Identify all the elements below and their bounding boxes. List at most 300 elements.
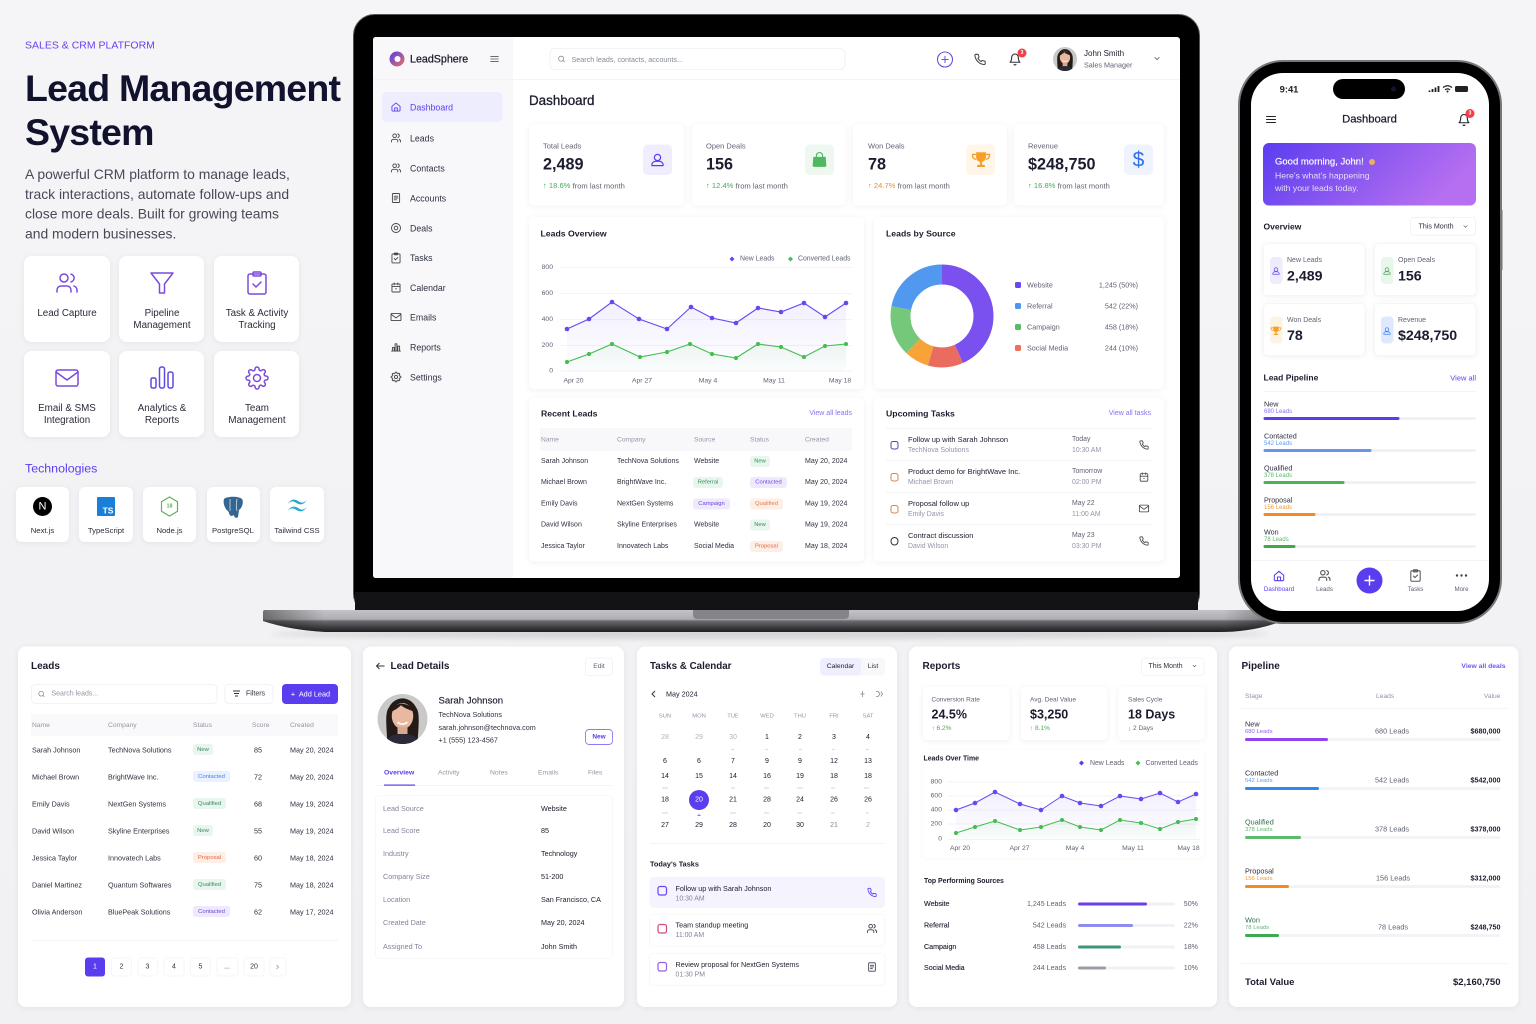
panel: lead details bbox=[363, 646, 624, 1007]
total value: $2,160,750 bbox=[1453, 977, 1500, 988]
icon: Next.js: N bbox=[39, 500, 47, 512]
line chart: leads over time: New Leads bbox=[1090, 760, 1125, 767]
search box: Search leads, contacts, accounts... bbox=[572, 55, 683, 64]
KPI: sales cycle: 18 Days bbox=[1128, 708, 1175, 722]
table rows: May 19, 2024 bbox=[290, 826, 334, 836]
feature labels: Reports bbox=[145, 415, 179, 426]
technology labels: TypeScript bbox=[88, 526, 125, 535]
profile photo bbox=[378, 694, 428, 744]
donut legend: 244 (10%) bbox=[1105, 344, 1138, 352]
detail tabs: Overview bbox=[384, 770, 415, 776]
pipeline rows: 680 Leads bbox=[1245, 729, 1273, 735]
line chart: 200 bbox=[542, 342, 553, 349]
calendar dates: 2 bbox=[866, 822, 870, 829]
pipeline header: Stage bbox=[1245, 693, 1263, 700]
calendar dates: 16 bbox=[763, 773, 771, 780]
task rows bbox=[891, 435, 1149, 550]
feature labels: Team bbox=[245, 403, 269, 414]
panel: pipeline: Pipeline bbox=[1242, 661, 1280, 672]
calendar dates: 21 bbox=[729, 796, 737, 804]
technology labels bbox=[31, 526, 320, 535]
pipeline rows: $680,000 bbox=[1471, 726, 1500, 736]
pagination: 5 bbox=[199, 964, 203, 970]
table header: Name bbox=[32, 722, 50, 729]
pagination bbox=[85, 958, 286, 976]
table rows: May 19, 2024 bbox=[805, 522, 848, 528]
line chart: Apr 27 bbox=[632, 378, 652, 384]
KPI: sales cycle: Sales Cycle bbox=[1128, 696, 1163, 704]
task rows: Proposal follow up bbox=[908, 499, 969, 508]
stat: won deals bbox=[1264, 304, 1365, 356]
chart legend: Converted Leads bbox=[798, 256, 851, 262]
KPI: conversion rate: 24.5% bbox=[932, 708, 967, 722]
top performing sources: Top Performing Sources bbox=[924, 878, 1004, 885]
table rows: May 18, 2024 bbox=[805, 543, 848, 550]
detail tabs: Notes bbox=[490, 770, 508, 776]
period dropdown bbox=[1142, 658, 1204, 676]
table header: Status bbox=[750, 436, 770, 444]
calendar dates: 1 bbox=[765, 734, 769, 741]
task: standup: 11:00 AM bbox=[676, 932, 704, 939]
task: follow up: Follow up with Sarah Johnson bbox=[676, 884, 771, 893]
detail table: San Francisco, CA bbox=[541, 895, 601, 904]
detail tabs bbox=[375, 770, 612, 786]
task rows: 03:30 PM bbox=[1072, 543, 1102, 550]
welcome banner bbox=[1263, 143, 1476, 206]
pipeline rows: 78 Leads bbox=[1245, 925, 1269, 931]
calendar dates: 29 bbox=[695, 822, 703, 829]
donut legend: 542 (22%) bbox=[1105, 302, 1138, 310]
nav items: Accounts bbox=[410, 194, 447, 204]
panel: reports: Reports bbox=[922, 661, 961, 672]
table rows: Quantum Softwares bbox=[108, 880, 172, 890]
line chart: May 11 bbox=[763, 378, 785, 384]
panel: leads overview bbox=[529, 217, 864, 389]
line chart: leads over time bbox=[923, 750, 1204, 858]
nav: dashboard: Dashboard bbox=[1264, 586, 1295, 593]
line chart: Apr 20 bbox=[563, 378, 584, 384]
table rows: May 18, 2024 bbox=[290, 880, 334, 890]
panel: recent leads bbox=[529, 398, 864, 562]
table rows: 62 bbox=[254, 908, 262, 916]
table rows: New bbox=[197, 747, 210, 753]
detail table: Technology bbox=[541, 849, 578, 858]
pipeline rows: $378,000 bbox=[1471, 824, 1500, 834]
table rows: New bbox=[197, 828, 210, 834]
donut legend: 1,245 (50%) bbox=[1099, 280, 1138, 290]
line chart: May 4 bbox=[699, 378, 717, 384]
task rows: TechNova Solutions bbox=[908, 447, 969, 454]
table rows: May 20, 2024 bbox=[290, 772, 334, 782]
table rows: BrightWave Inc. bbox=[617, 479, 666, 486]
pipeline rows: 680 Leads bbox=[1264, 409, 1292, 415]
nav items: Tasks bbox=[410, 253, 433, 263]
KPI: open deals bbox=[692, 124, 846, 206]
detail table: 85 bbox=[541, 826, 549, 835]
table rows: Daniel Martinez bbox=[32, 880, 82, 890]
icon: Node.js bbox=[162, 497, 178, 516]
calendar dates: 6 bbox=[663, 758, 667, 765]
view toggle: List bbox=[868, 663, 878, 670]
profile text bbox=[438, 696, 536, 744]
lead pipeline: View all bbox=[1450, 374, 1476, 382]
total value: Total Value bbox=[1245, 977, 1294, 988]
title: System bbox=[25, 111, 154, 153]
KPI: sales cycle: ↓ 2 Days bbox=[1128, 725, 1154, 732]
pipeline rows: New bbox=[1245, 720, 1260, 728]
KPI: average deal value: ↑ 8.1% bbox=[1030, 725, 1050, 732]
pipeline rows: 378 Leads bbox=[1375, 824, 1409, 834]
user name bbox=[1084, 49, 1133, 70]
pipeline rows: 156 Leads bbox=[1376, 874, 1410, 882]
table header: Created bbox=[805, 436, 829, 444]
nav items: Deals bbox=[410, 224, 433, 234]
calendar dates: 20 bbox=[763, 822, 771, 829]
nav items: Settings bbox=[410, 372, 442, 382]
detail tabs: Emails bbox=[538, 770, 559, 776]
phone header: Dashboard bbox=[1342, 114, 1397, 126]
table rows: New bbox=[754, 458, 767, 464]
panel: tasks and calendar bbox=[637, 646, 897, 1007]
technology labels: PostgreSQL bbox=[212, 526, 255, 535]
line chart: leads over time: 400 bbox=[931, 806, 942, 814]
stat: won deals: 78 bbox=[1287, 328, 1303, 344]
donut legend: Website bbox=[1027, 280, 1053, 290]
task rows: 02:00 PM bbox=[1072, 479, 1102, 486]
top performing sources: 458 Leads bbox=[1033, 943, 1066, 951]
selected date bbox=[689, 790, 709, 810]
icon: bag bbox=[805, 144, 834, 175]
table rows bbox=[541, 456, 848, 552]
task rows: Product demo for BrightWave Inc. bbox=[908, 467, 1020, 476]
line chart: 600 bbox=[542, 290, 553, 297]
pipeline rows: 378 Leads bbox=[1264, 473, 1292, 479]
pipeline rows: Qualified bbox=[1245, 818, 1274, 826]
bottom navigation bbox=[1251, 560, 1489, 594]
panel: pipeline bbox=[1229, 646, 1518, 1007]
overview heading: Overview bbox=[1264, 222, 1302, 232]
table rows: Contacted bbox=[198, 909, 225, 915]
table rows: New bbox=[754, 522, 767, 528]
table rows: 85 bbox=[254, 746, 262, 754]
donut legend: Campaign bbox=[1027, 322, 1060, 332]
line chart: leads over time: 200 bbox=[931, 820, 942, 828]
phone header: 3 bbox=[1469, 110, 1472, 116]
panel: upcoming tasks: View all tasks bbox=[1109, 410, 1151, 417]
lead pipeline: Lead Pipeline bbox=[1264, 372, 1319, 382]
top performing sources: 10% bbox=[1184, 964, 1199, 972]
phone body bbox=[1238, 61, 1502, 623]
add lead button bbox=[282, 684, 338, 704]
table header bbox=[540, 428, 852, 451]
detail table: Lead Score bbox=[383, 826, 420, 835]
stat: revenue: $248,750 bbox=[1398, 328, 1457, 344]
calendar dates: 18 bbox=[864, 773, 872, 780]
detail tabs: Files bbox=[588, 770, 603, 776]
top performing sources: 244 Leads bbox=[1033, 964, 1066, 972]
donut legend: Referral bbox=[1027, 302, 1053, 310]
line chart: 800 bbox=[542, 264, 553, 271]
task: follow up bbox=[650, 877, 885, 908]
nav: tasks bbox=[1408, 570, 1423, 593]
KPI: total leads bbox=[529, 124, 684, 206]
add button bbox=[1356, 568, 1382, 594]
pipeline header: Value bbox=[1484, 693, 1501, 700]
panel: recent leads: Recent Leads bbox=[541, 408, 598, 418]
calendar dates: 20 bbox=[695, 796, 703, 804]
detail table: Lead Source bbox=[383, 804, 424, 813]
edit button: Edit bbox=[593, 663, 605, 670]
calendar dates: 29 bbox=[695, 734, 703, 741]
task: follow up: 10:30 AM bbox=[676, 896, 705, 902]
user menu chevron bbox=[1155, 57, 1159, 60]
KPI: revenue: ↑ 16.8% from last month bbox=[1028, 181, 1110, 190]
table rows: Innovatech Labs bbox=[617, 543, 669, 550]
table header: Score bbox=[252, 722, 270, 729]
table header: Company bbox=[617, 436, 646, 444]
pipeline rows bbox=[1264, 400, 1476, 548]
menu icon bbox=[491, 56, 498, 62]
table rows: NextGen Systems bbox=[108, 800, 166, 808]
stat: open deals: 156 bbox=[1398, 268, 1422, 284]
table rows: Sarah Johnson bbox=[32, 746, 80, 754]
intro paragraph: A powerful CRM platform to manage leads, bbox=[25, 166, 290, 182]
feature labels bbox=[37, 308, 288, 426]
icon: notifications: 3 bbox=[1021, 50, 1024, 56]
profile text: TechNova Solutions bbox=[438, 710, 502, 719]
month header: May 2024 bbox=[666, 690, 698, 698]
filters button bbox=[225, 684, 273, 704]
nav items: Contacts bbox=[410, 164, 445, 174]
task: standup: Team standup meeting bbox=[676, 920, 748, 930]
top performing sources: Referral bbox=[924, 922, 950, 930]
phone header bbox=[1266, 109, 1474, 126]
table rows: May 19, 2024 bbox=[805, 500, 848, 508]
pipeline header bbox=[1245, 693, 1501, 700]
feature labels: Tracking bbox=[238, 320, 276, 331]
table rows: Skyline Enterprises bbox=[617, 522, 677, 528]
screen bbox=[373, 37, 1180, 578]
calendar dates: 7 bbox=[731, 758, 735, 765]
weekday row: TUE bbox=[727, 714, 739, 720]
laptop bbox=[263, 14, 1285, 639]
today's tasks heading: Today's Tasks bbox=[650, 860, 699, 868]
laptop base bbox=[263, 610, 1285, 632]
pipeline rows: 156 Leads bbox=[1264, 505, 1292, 511]
page heading: Dashboard bbox=[529, 93, 595, 108]
table rows bbox=[32, 744, 334, 917]
view toggle bbox=[820, 658, 885, 676]
technology cards bbox=[16, 487, 324, 542]
table rows: Skyline Enterprises bbox=[108, 826, 170, 836]
line chart: leads over time: Leads Over Time bbox=[924, 756, 979, 762]
pipeline rows: Won bbox=[1245, 916, 1260, 924]
table rows: TechNova Solutions bbox=[108, 746, 172, 754]
donut legend: 458 (18%) bbox=[1105, 322, 1138, 332]
icon: analytics bars bbox=[151, 367, 173, 388]
detail table: Location bbox=[383, 895, 410, 904]
table rows: Olivia Anderson bbox=[32, 908, 82, 916]
panel: tasks and calendar: Tasks & Calendar bbox=[650, 661, 732, 672]
pipeline header: Leads bbox=[1376, 693, 1395, 700]
stat: new leads: New Leads bbox=[1287, 257, 1323, 264]
weekday row: THU bbox=[794, 714, 806, 720]
calendar dates: 2 bbox=[798, 734, 802, 741]
user name: Sales Manager bbox=[1084, 60, 1133, 70]
top performing sources: 50% bbox=[1184, 900, 1199, 908]
icon: PostgreSQL bbox=[224, 497, 243, 518]
title bbox=[25, 67, 341, 153]
KPI: won deals: 78 bbox=[868, 156, 886, 174]
line chart: leads over time: Apr 20 bbox=[950, 845, 970, 852]
table rows: David Wilson bbox=[541, 522, 582, 528]
phone screen bbox=[1251, 73, 1489, 611]
welcome banner: Here's what's happening bbox=[1275, 170, 1370, 180]
icon: Node.js: 18 bbox=[166, 504, 173, 510]
technology labels: Tailwind CSS bbox=[274, 526, 320, 535]
profile text: +1 (555) 123-4567 bbox=[438, 736, 498, 744]
line chart: leads over time: May 11 bbox=[1122, 845, 1144, 852]
laptop bezel bbox=[354, 14, 1200, 614]
pipeline rows: 542 Leads bbox=[1264, 441, 1292, 447]
task rows: Emily Davis bbox=[908, 511, 945, 518]
icon: lead capture bbox=[57, 274, 77, 292]
detail table: Assigned To bbox=[383, 942, 422, 951]
KPI: sales cycle bbox=[1118, 687, 1204, 740]
status bar bbox=[1280, 79, 1468, 99]
table header: Source bbox=[694, 436, 715, 444]
pipeline rows: Contacted bbox=[1264, 432, 1297, 440]
active nav item bbox=[382, 92, 502, 122]
line chart: leads over time: May 4 bbox=[1066, 845, 1084, 852]
calendar dates: 9 bbox=[765, 758, 769, 765]
weekday row: MON bbox=[692, 714, 706, 720]
KPI: total leads: Total Leads bbox=[543, 142, 582, 150]
detail table: 51-200 bbox=[541, 872, 563, 881]
top performing sources: Website bbox=[924, 900, 950, 908]
detail table: John Smith bbox=[541, 942, 577, 951]
detail table: Website bbox=[541, 804, 567, 813]
title: Lead Management bbox=[25, 67, 341, 109]
table rows: Proposal bbox=[755, 544, 778, 550]
chart legend bbox=[730, 256, 851, 262]
icon: TypeScript bbox=[97, 497, 115, 516]
table rows: Website bbox=[694, 458, 719, 465]
logo bbox=[390, 52, 468, 66]
profile text: Sarah Johnson bbox=[438, 696, 503, 706]
feature labels: Analytics & bbox=[138, 403, 187, 414]
detail table bbox=[376, 796, 612, 958]
welcome banner: Good morning, John! bbox=[1275, 156, 1366, 168]
nav: more bbox=[1454, 574, 1469, 593]
task rows: Michael Brown bbox=[908, 479, 953, 486]
pagination: 2 bbox=[120, 964, 124, 970]
nav: more: More bbox=[1454, 586, 1469, 593]
table rows: Proposal bbox=[198, 855, 221, 861]
line chart: May 18 bbox=[829, 378, 851, 384]
table rows: Michael Brown bbox=[541, 479, 587, 486]
table rows: May 20, 2024 bbox=[290, 746, 334, 754]
nav: leads: Leads bbox=[1316, 586, 1333, 593]
pagination: 1 bbox=[93, 964, 97, 970]
table rows: 55 bbox=[254, 826, 262, 836]
period dropdown: This Month bbox=[1148, 663, 1183, 670]
KPI: conversion rate: ↑ 6.2% bbox=[932, 725, 952, 732]
donut legend bbox=[1015, 280, 1138, 352]
donut chart bbox=[900, 274, 984, 358]
table rows: Campaign bbox=[698, 501, 725, 507]
icon: TypeScript: TS bbox=[103, 506, 114, 516]
icon: Tailwind bbox=[288, 500, 306, 511]
top performing sources: Campaign bbox=[924, 943, 956, 951]
table rows: Sarah Johnson bbox=[541, 458, 588, 465]
intro paragraph: and modern businesses. bbox=[25, 226, 176, 242]
KPI: open deals: ↑ 12.4% from last month bbox=[706, 181, 788, 190]
table rows: David Wilson bbox=[32, 826, 74, 836]
icon: Next.js bbox=[33, 497, 52, 516]
line chart: leads over time: 0 bbox=[938, 836, 942, 842]
table rows: May 20, 2024 bbox=[805, 458, 848, 465]
table header: Name bbox=[541, 436, 559, 444]
table rows: Emily Davis bbox=[32, 800, 70, 808]
top performing sources: 18% bbox=[1184, 943, 1199, 951]
calendar dates: 18 bbox=[830, 773, 838, 780]
icon: pipeline funnel bbox=[151, 273, 173, 293]
pipeline rows: Proposal bbox=[1245, 866, 1274, 876]
calendar dates: 6 bbox=[697, 758, 701, 765]
pipeline rows: 542 Leads bbox=[1245, 778, 1273, 784]
calendar dates: 26 bbox=[864, 796, 872, 804]
total value bbox=[1245, 977, 1500, 988]
task rows: 11:00 AM bbox=[1072, 511, 1101, 518]
table header: Created bbox=[290, 722, 314, 729]
KPI: average deal value: Avg. Deal Value bbox=[1030, 696, 1076, 704]
table rows: May 17, 2024 bbox=[290, 908, 334, 916]
stat: open deals: Open Deals bbox=[1398, 257, 1435, 264]
period dropdown bbox=[1410, 218, 1476, 236]
panel: upcoming tasks: Upcoming Tasks bbox=[886, 408, 955, 418]
pipeline rows: 78 Leads bbox=[1378, 922, 1408, 932]
stat: new leads: 2,489 bbox=[1287, 268, 1323, 284]
line chart: leads over time: May 18 bbox=[1177, 845, 1200, 852]
detail table: Created Date bbox=[383, 918, 426, 927]
calendar dates: 19 bbox=[796, 773, 804, 780]
pipeline rows: 542 Leads bbox=[1375, 776, 1409, 784]
feature labels: Management bbox=[228, 415, 286, 426]
icon: notifications bbox=[1010, 48, 1026, 65]
top bar bbox=[373, 47, 1180, 80]
table rows: Qualified bbox=[755, 501, 778, 507]
calendar dates: 12 bbox=[830, 758, 838, 765]
pagination: 4 bbox=[172, 964, 176, 970]
stat: open deals bbox=[1374, 244, 1476, 296]
table rows: Contacted bbox=[755, 480, 782, 486]
panel: leads table: Leads bbox=[31, 661, 60, 672]
task rows: Today bbox=[1072, 436, 1091, 443]
icon: task clipboard bbox=[248, 272, 266, 294]
line chart: leads over time: Apr 27 bbox=[1009, 845, 1030, 852]
table rows: Contacted bbox=[198, 774, 225, 780]
pagination: 20 bbox=[250, 964, 258, 970]
feature labels: Integration bbox=[44, 415, 90, 426]
status bar: 9:41 bbox=[1280, 84, 1298, 94]
calendar dates: 15 bbox=[695, 773, 703, 780]
weekday row bbox=[659, 714, 874, 720]
feature labels: Pipeline bbox=[145, 308, 180, 319]
weekday row: WED bbox=[760, 714, 774, 720]
task rows: 10:30 AM bbox=[1072, 447, 1101, 454]
table rows: NextGen Systems bbox=[617, 500, 674, 508]
